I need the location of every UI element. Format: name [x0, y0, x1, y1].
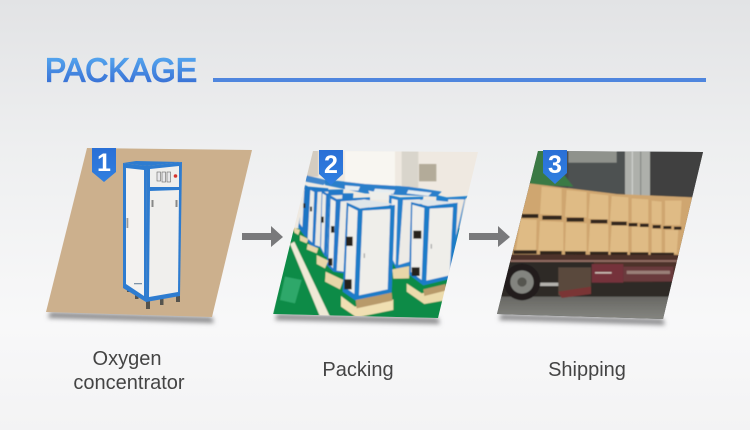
panel 1: oxygen concentrator: [46, 148, 252, 323]
label: packing: Packing: [322, 359, 394, 381]
badge 2: 2: [324, 151, 338, 179]
truck chassis: [508, 254, 685, 283]
road and shadow: [490, 287, 710, 323]
title: PACKAGE: [45, 52, 197, 90]
panel 3: shipping photo: [490, 145, 710, 325]
badge 3: [543, 150, 567, 184]
wheel: [504, 264, 540, 300]
badge 1: [92, 148, 116, 182]
back cabinets right: [436, 194, 468, 248]
cabinet row left: [298, 185, 328, 240]
label: concentrator: concentrator: [73, 372, 185, 394]
badge 1: 1: [97, 149, 111, 177]
front cabinet: [343, 202, 395, 301]
small pallets: [293, 227, 410, 289]
arrow 2: [469, 226, 510, 247]
right cabinet: [409, 202, 458, 285]
wooden crates: [512, 183, 693, 257]
arrow 1: [242, 226, 283, 247]
badge 3: 3: [548, 151, 562, 179]
icon: concentrator cabinet: [123, 161, 182, 309]
badge 2: [319, 150, 343, 185]
back rows: [305, 175, 328, 185]
title rule: [213, 78, 706, 82]
label: shipping: Shipping: [548, 359, 626, 381]
black labels: [303, 203, 334, 266]
label: oxygen concentrator: Oxygen: [93, 348, 161, 370]
panel 2: packing photo: [265, 145, 485, 325]
